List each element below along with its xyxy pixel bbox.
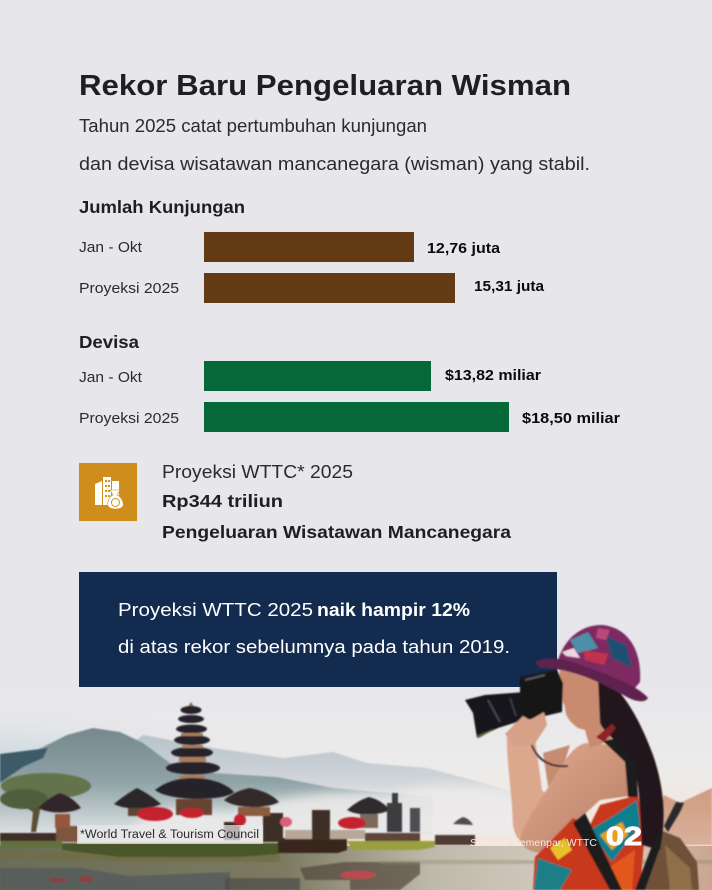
bar chart: Jumlah Kunjungan: Proyeksi 2025: [79, 281, 179, 297]
hat: [558, 625, 640, 694]
gate towers: [224, 810, 330, 842]
neck and face: [558, 668, 612, 748]
navy callout: di atas rekor sebelumnya pada tahun 2019.: [118, 636, 510, 657]
subtitle: [79, 116, 590, 174]
bar chart: Devisa: Jan - Okt: [79, 370, 142, 386]
navy callout: naik hampir 12%: [317, 599, 470, 620]
text block: WTTC projection: Proyeksi WTTC* 2025: [162, 462, 353, 482]
camera body: [520, 670, 563, 721]
hedges: [0, 841, 62, 848]
heading: Jumlah Kunjungan: Jumlah Kunjungan: [79, 197, 245, 217]
bar chart: Devisa: $18,50 miliar: [522, 411, 620, 427]
bar chart: Jumlah Kunjungan: [79, 232, 545, 303]
heading: Devisa: Devisa: [79, 332, 139, 352]
backpack: [645, 830, 699, 890]
walls: [0, 833, 56, 841]
far arm: [543, 745, 570, 790]
camera strap: [530, 738, 568, 766]
red flowers: [137, 807, 366, 829]
lens: [465, 692, 530, 738]
shrine roofs: [38, 793, 81, 812]
navy callout: Proyeksi WTTC 2025: [118, 599, 313, 620]
hair: [598, 678, 664, 850]
main mountain: [0, 728, 433, 835]
dress: [533, 795, 645, 890]
bar chart: Devisa: Proyeksi 2025: [79, 411, 179, 427]
footnote label: [77, 825, 263, 844]
source text: Sumber: Kemenpar, WTTC: [470, 837, 597, 849]
footnote label: *World Travel & Tourism Council: [80, 829, 259, 841]
text block: WTTC projection: [162, 462, 511, 542]
bar chart: Jumlah Kunjungan: 15,31 juta: [474, 279, 545, 295]
page number: 02: [606, 821, 642, 851]
text block: WTTC projection: Pengeluaran Wisatawan Mancanegara: [162, 522, 511, 542]
subtitle: dan devisa wisatawan mancanegara (wisman) yang stabil.: [79, 154, 590, 174]
navy callout: [79, 572, 557, 687]
near forearm: [507, 722, 552, 845]
big tree: [14, 798, 44, 832]
bar chart: Devisa: [79, 361, 620, 432]
title: Rekor Baru Pengeluaran Wisman: [79, 70, 571, 102]
subtitle: Tahun 2025 catat pertumbuhan kunjungan: [79, 116, 427, 136]
text block: WTTC projection: Rp344 triliun: [162, 491, 283, 511]
bar chart: Devisa: $13,82 miliar: [445, 368, 541, 384]
mist: [130, 785, 540, 835]
back and upper arm: [520, 743, 638, 853]
right hills: [640, 788, 712, 845]
bar chart: Jumlah Kunjungan: 12,76 juta: [427, 241, 501, 257]
pagoda: [155, 702, 234, 815]
icon: buildings and money bag: [79, 463, 137, 521]
water: [0, 846, 712, 890]
distant mountains: [130, 735, 540, 835]
scene: Balinese temple on the lake: [0, 680, 712, 890]
dark ridge: [0, 748, 48, 783]
bar chart: Jumlah Kunjungan: Jan - Okt: [79, 240, 142, 256]
straps: [573, 813, 622, 890]
hand: [505, 712, 547, 746]
photo: woman photographer: [465, 625, 699, 890]
